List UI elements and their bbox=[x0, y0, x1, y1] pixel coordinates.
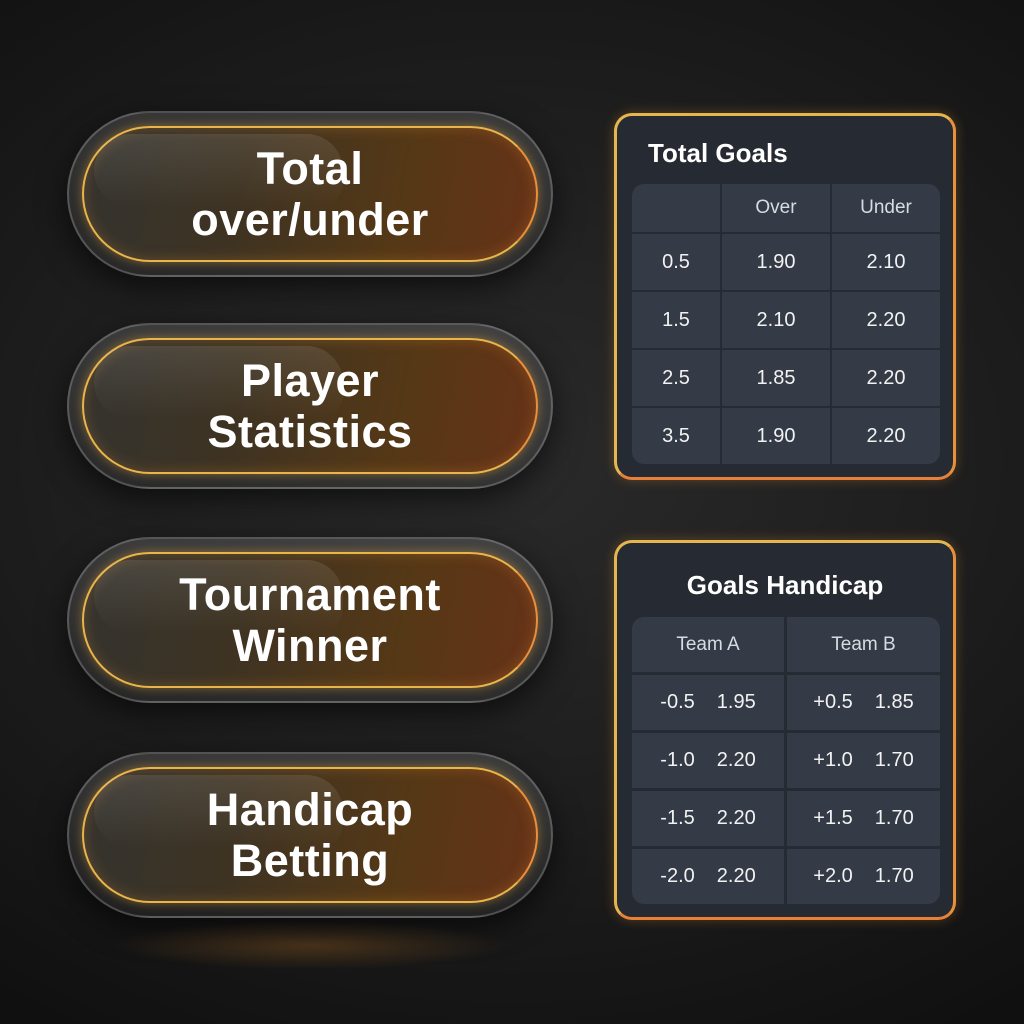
table grid: 1.95 bbox=[717, 691, 756, 713]
table grid: 2.20 bbox=[717, 807, 756, 829]
table grid: 2.5 bbox=[662, 366, 690, 388]
table grid: +1.5 bbox=[813, 807, 853, 829]
table grid bbox=[632, 617, 940, 904]
table grid: 2.20 bbox=[717, 865, 756, 887]
table grid: 1.85 bbox=[757, 366, 795, 388]
pill: Total over/under: Total bbox=[257, 143, 363, 194]
table grid: 1.85 bbox=[875, 691, 914, 713]
table grid: ‑0.5 bbox=[660, 691, 695, 713]
table grid: 1.70 bbox=[875, 865, 914, 887]
table grid: ‑2.0 bbox=[660, 865, 695, 887]
table grid: 1.70 bbox=[875, 807, 914, 829]
table grid: 1.70 bbox=[875, 749, 914, 771]
table grid: ‑1.0 bbox=[660, 749, 695, 771]
table grid: 3.5 bbox=[662, 424, 690, 446]
table grid: Over bbox=[755, 197, 797, 218]
table grid: 1.5 bbox=[662, 308, 690, 330]
table grid: Under bbox=[860, 197, 912, 218]
table grid: +1.0 bbox=[813, 749, 853, 771]
pill: Tournament Winner bbox=[67, 537, 553, 703]
table grid: 2.10 bbox=[757, 308, 795, 330]
table grid: 2.10 bbox=[867, 250, 905, 272]
pill: Handicap Betting: Handicap bbox=[207, 784, 413, 835]
table grid: 2.20 bbox=[867, 366, 905, 388]
pill: Player Statistics: Statistics bbox=[207, 406, 413, 457]
pill: Total over/under bbox=[67, 111, 553, 277]
table grid bbox=[632, 184, 940, 464]
pill: Player Statistics: Player bbox=[241, 355, 379, 406]
table grid: ‑1.5 bbox=[660, 807, 695, 829]
pill: Tournament Winner: Winner bbox=[232, 620, 388, 671]
table grid: 1.90 bbox=[757, 424, 795, 446]
heading: Total Goals: Total Goals bbox=[648, 138, 788, 168]
table grid: 1.90 bbox=[757, 250, 795, 272]
pill: Tournament Winner: Tournament bbox=[179, 569, 441, 620]
pill: Player Statistics bbox=[67, 323, 553, 489]
panel: Total Goals table bbox=[614, 113, 956, 480]
pill: Total over/under: over/under bbox=[191, 194, 429, 245]
table grid: 2.20 bbox=[867, 308, 905, 330]
glow under pills bbox=[110, 920, 510, 970]
pill: Handicap Betting bbox=[67, 752, 553, 918]
table grid: +0.5 bbox=[813, 691, 853, 713]
heading: Goals Handicap: Goals Handicap bbox=[687, 570, 883, 600]
pill: Handicap Betting: Betting bbox=[231, 835, 389, 886]
table grid: Team B bbox=[831, 634, 896, 654]
table grid: 2.20 bbox=[717, 749, 756, 771]
table grid: 0.5 bbox=[662, 250, 690, 272]
table grid: +2.0 bbox=[813, 865, 853, 887]
panel: Goals Handicap table bbox=[614, 540, 956, 920]
table grid: Team A bbox=[676, 634, 740, 654]
table grid: 2.20 bbox=[867, 424, 905, 446]
